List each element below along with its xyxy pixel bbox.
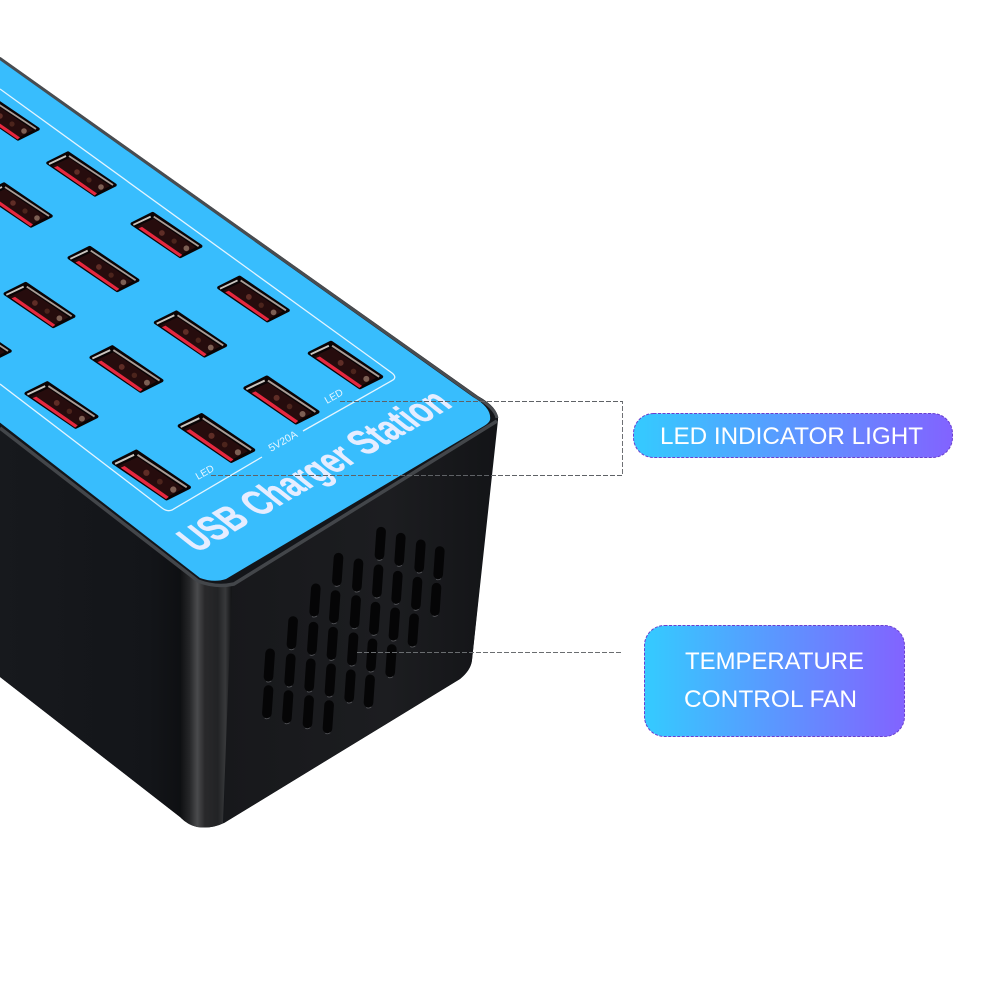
blue top panel — [0, 56, 490, 581]
socket row 3 — [0, 284, 253, 462]
LED label left: LED — [194, 463, 216, 483]
callout: temperature control fan: CONTROL FAN — [684, 686, 857, 713]
callout: temperature control fan: TEMPERATURE — [685, 648, 864, 675]
top rim — [0, 421, 497, 585]
LED label right: LED — [323, 387, 345, 407]
callout: LED indicator light — [634, 414, 952, 458]
callout: temperature control fan — [644, 626, 904, 736]
5V20A label: 5V20A — [266, 428, 300, 455]
rounded vertical corner — [181, 566, 232, 828]
USB sockets — [0, 97, 381, 499]
brand text: USB Charger Station — [167, 382, 462, 559]
socket row 1 — [0, 97, 381, 388]
left side face — [0, 428, 200, 822]
leader line: LED indicator — [210, 402, 622, 476]
front face — [224, 420, 497, 823]
leader line: fan — [357, 652, 622, 654]
callout: LED indicator light: LED INDICATOR LIGHT — [660, 423, 923, 450]
inner white outline — [0, 89, 395, 511]
back rim — [0, 58, 497, 418]
product: USB charging station — [0, 56, 498, 828]
socket row 4 — [26, 383, 189, 499]
socket row 2 — [0, 184, 318, 423]
body silhouette — [0, 57, 498, 828]
fan vent slots — [262, 527, 445, 734]
